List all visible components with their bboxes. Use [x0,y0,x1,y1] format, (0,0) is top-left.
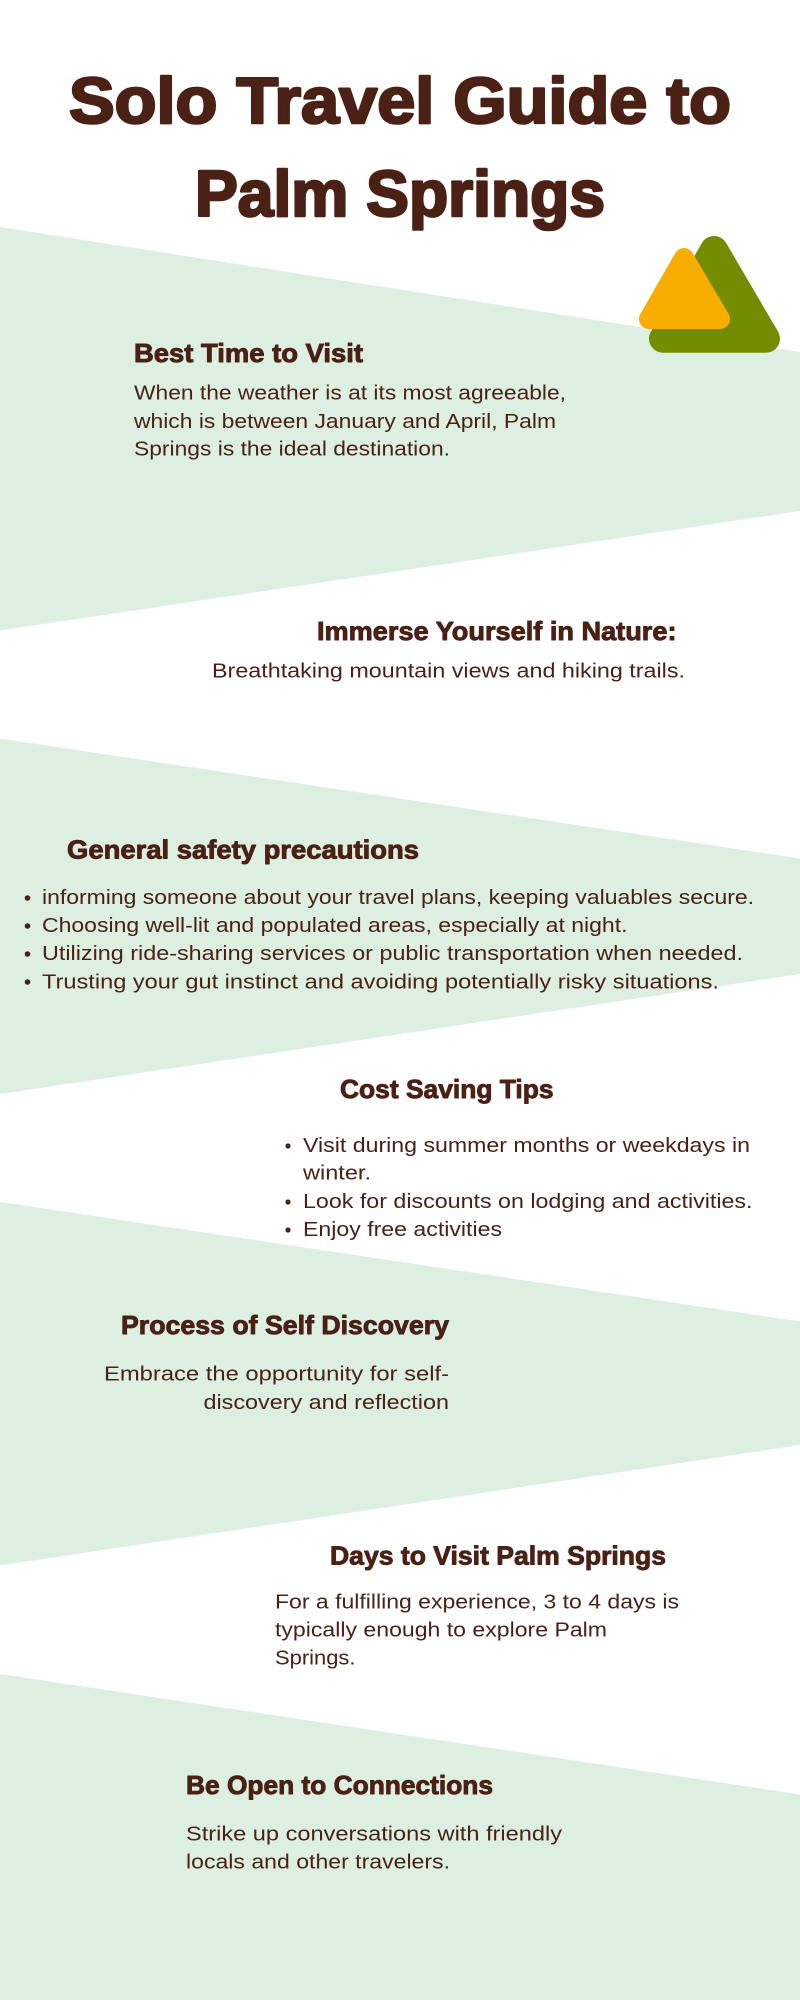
section: days to visit palm springs: For a fulfilling experience, 3 to 4 days is [275,1590,679,1613]
title [69,64,731,230]
section: cost saving tips: winter. [302,1161,371,1184]
section: general safety precautions: Utilizing ride-sharing services or public transportation when needed. [42,942,743,965]
section: days to visit palm springs: Days to Visit Palm Springs [330,1540,666,1570]
section: be open to connections: locals and other travelers. [186,1850,450,1873]
section: days to visit palm springs: Springs. [275,1646,356,1669]
section: general safety precautions: General safety precautions [67,834,419,864]
section: immerse yourself in nature: Immerse Yourself in Nature: [317,616,676,646]
section: be open to connections: Strike up conversations with friendly [186,1822,563,1845]
icon: overlapping triangles [649,250,766,339]
section: general safety precautions [25,834,754,993]
section: general safety precautions: Choosing well-lit and populated areas, especially at night. [42,914,628,937]
section: process of self discovery: discovery and reflection [204,1391,449,1414]
section: process of self discovery: Embrace the opportunity for self- [104,1362,449,1385]
section: best time to visit: When the weather is at its most agreeable, [134,381,566,404]
section: immerse yourself in nature [212,616,685,682]
section: best time to visit [133,338,566,460]
panel: green band 2 [0,738,800,1094]
section: best time to visit: Best Time to Visit [134,338,363,368]
title: Solo Travel Guide to [69,64,731,137]
section: immerse yourself in nature: Breathtaking mountain views and hiking trails. [212,659,685,682]
section: days to visit palm springs [275,1540,679,1669]
section: process of self discovery [104,1310,450,1414]
panel: green band 4 [0,1674,800,2000]
section: cost saving tips [285,1074,752,1241]
section: cost saving tips: Cost Saving Tips [340,1074,554,1104]
section: process of self discovery: Process of Self Discovery [121,1310,450,1340]
section: be open to connections: Be Open to Connections [186,1770,493,1800]
section: be open to connections [186,1770,563,1873]
panel: green band 3 [0,1202,800,1566]
section: general safety precautions: informing someone about your travel plans, keeping valuables secure. [42,886,754,909]
section: cost saving tips: Visit during summer months or weekdays in [303,1134,750,1157]
section: cost saving tips: Look for discounts on lodging and activities. [303,1190,752,1213]
section: cost saving tips: Enjoy free activities [303,1218,502,1241]
section: best time to visit: Springs is the ideal destination. [134,437,450,460]
section: general safety precautions: Trusting your gut instinct and avoiding potentially risky situations. [42,970,719,993]
title: Palm Springs [195,157,605,230]
section: days to visit palm springs: typically enough to explore Palm [275,1618,607,1641]
panel: green band 1 [0,227,800,630]
section: best time to visit: which is between January and April, Palm [133,410,556,433]
